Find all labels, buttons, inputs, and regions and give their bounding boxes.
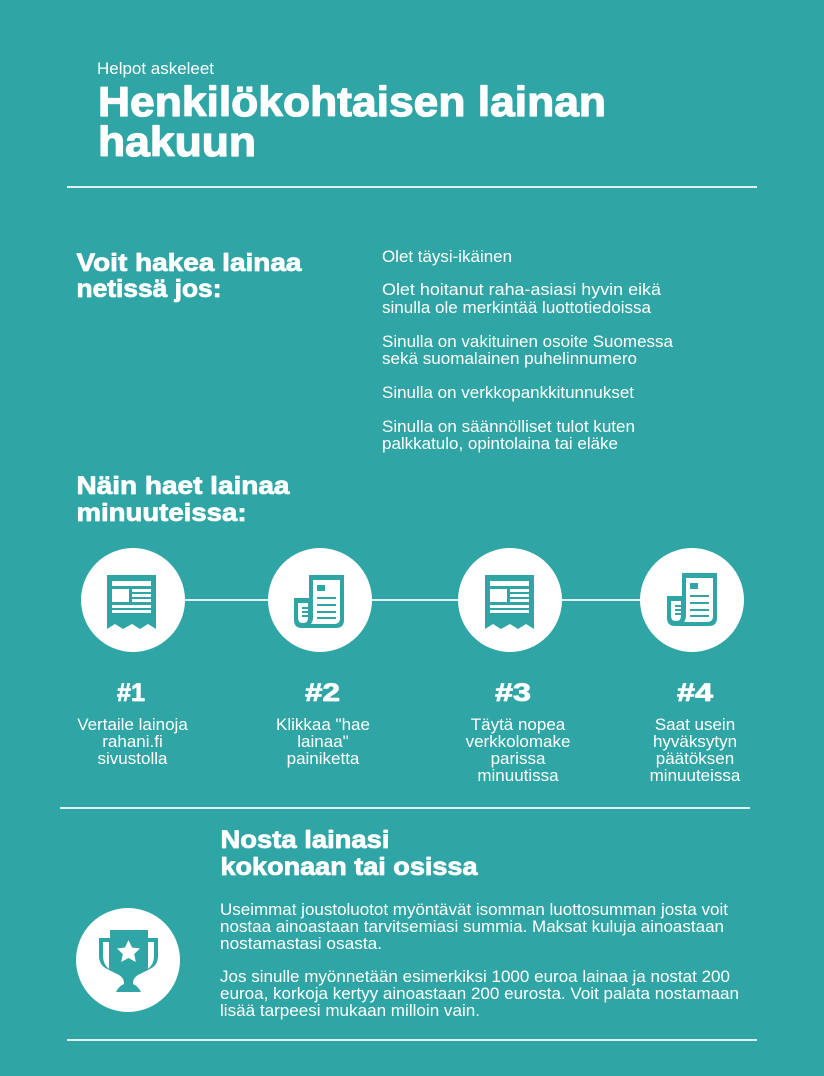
icon: step 3 document xyxy=(458,548,562,652)
step 4 text: minuuteissa xyxy=(650,766,741,785)
step 3 text: #3 xyxy=(495,679,531,707)
text block: withdraw explanation: nostaa ainoastaan tarvitsemiasi summia. Maksat kuluja ainoastaan xyxy=(220,917,724,936)
text block: withdraw explanation: Useimmat joustoluotot myöntävät isomman luottosumman josta voit xyxy=(220,900,728,919)
text block: withdraw explanation: lisää tarpeesi mukaan milloin vain. xyxy=(220,1001,480,1020)
text block: eligibility list: sekä suomalainen puhelinnumero xyxy=(382,349,637,368)
step 2 text: #2 xyxy=(305,679,340,707)
text block: eligibility list xyxy=(382,247,674,453)
text block: withdraw explanation: euroa, korkoja kertyy ainoastaan 200 eurosta. Voit palata nostamaan xyxy=(220,984,739,1003)
step 3 text: Täytä nopea xyxy=(471,715,566,734)
text block: withdraw explanation: nostamastasi osasta. xyxy=(220,934,382,953)
step 2 text: Klikkaa "hae xyxy=(276,715,370,734)
heading: withdraw: kokonaan tai osissa xyxy=(220,853,479,881)
title: Henkilökohtaisen lainan xyxy=(98,78,606,125)
step 1 text xyxy=(77,679,188,768)
heading: eligibility: Voit hakea lainaa xyxy=(76,249,303,277)
text block: withdraw explanation: Jos sinulle myönnetään esimerkiksi 1000 euroa lainaa ja nostat 200 xyxy=(220,967,730,986)
text block: withdraw explanation xyxy=(220,900,739,1020)
text block: eligibility list: Sinulla on vakituinen osoite Suomessa xyxy=(382,332,674,351)
step 3 text: parissa xyxy=(491,749,546,768)
step 1 text: Vertaile lainoja xyxy=(77,715,188,734)
icon: step 1 document xyxy=(81,548,185,652)
text block: eligibility list: Olet täysi-ikäinen xyxy=(382,247,512,266)
title xyxy=(97,59,606,165)
heading: withdraw: Nosta lainasi xyxy=(220,826,390,854)
text block: eligibility list: palkkatulo, opintolaina tai eläke xyxy=(382,434,618,453)
heading: how to apply xyxy=(76,472,291,527)
step 4 text xyxy=(650,679,741,785)
step 2 text: lainaa" xyxy=(297,732,349,751)
title: hakuun xyxy=(98,118,256,165)
heading: eligibility: netissä jos: xyxy=(76,275,222,303)
heading: eligibility xyxy=(76,249,303,303)
step 1 text: #1 xyxy=(117,679,145,707)
step 3 text xyxy=(466,679,570,785)
text block: eligibility list: sinulla ole merkintää luottotiedoissa xyxy=(382,298,652,317)
heading: how to apply: Näin haet lainaa xyxy=(76,472,291,500)
icon: trophy xyxy=(76,908,180,1012)
text block: eligibility list: Olet hoitanut raha-asiasi hyvin eikä xyxy=(382,280,662,299)
step 3 text: verkkolomake xyxy=(466,732,570,751)
icon: step 2 newspaper xyxy=(268,548,372,652)
heading: how to apply: minuuteissa: xyxy=(76,499,246,527)
step 4 text: Saat usein xyxy=(655,715,735,734)
icon: step 4 newspaper xyxy=(640,548,744,652)
title: Helpot askeleet xyxy=(97,59,214,78)
text block: eligibility list: Sinulla on verkkopankkitunnukset xyxy=(382,383,634,402)
step 1 text: rahani.fi xyxy=(102,732,163,751)
step 2 text: painiketta xyxy=(287,749,360,768)
step 3 text: minuutissa xyxy=(477,766,559,785)
step 2 text xyxy=(276,679,370,768)
heading: withdraw xyxy=(220,826,479,881)
step 4 text: päätöksen xyxy=(656,749,734,768)
text block: eligibility list: Sinulla on säännölliset tulot kuten xyxy=(382,417,635,436)
step 1 text: sivustolla xyxy=(98,749,168,768)
step 4 text: #4 xyxy=(677,679,713,707)
step 4 text: hyväksytyn xyxy=(653,732,737,751)
